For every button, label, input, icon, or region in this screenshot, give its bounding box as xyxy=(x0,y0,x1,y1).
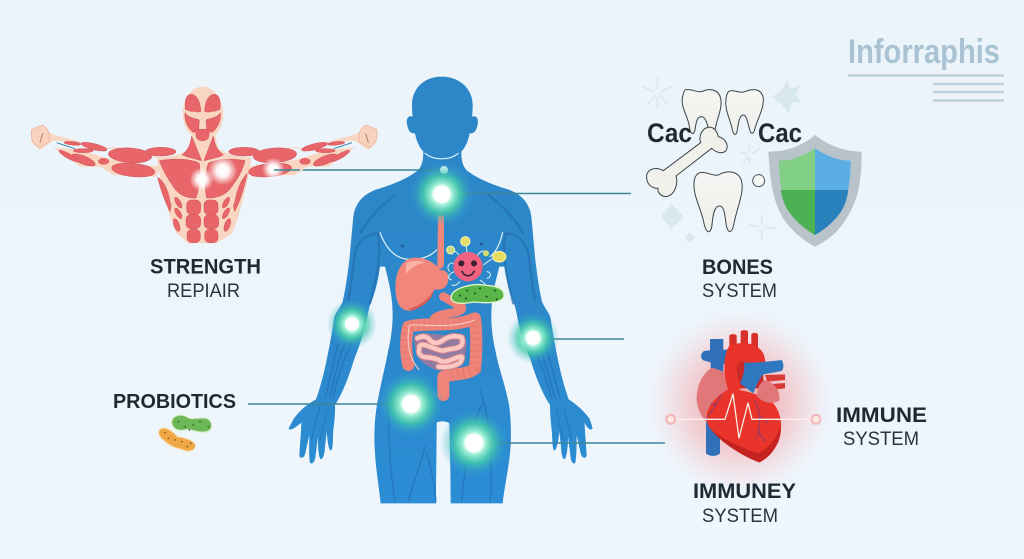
label: strength repair xyxy=(150,256,261,302)
arm connector over muscle xyxy=(274,169,300,171)
panel: muscle figure xyxy=(31,87,377,243)
head muscles xyxy=(185,94,201,112)
small intestine xyxy=(414,333,466,371)
duodenum xyxy=(433,297,462,323)
fists xyxy=(31,125,377,147)
vena cava lower xyxy=(706,412,720,456)
microbe character xyxy=(447,237,506,288)
nipples xyxy=(401,244,404,248)
icon: probiotic bacteria xyxy=(159,415,212,451)
label: immuney system: SYSTEM xyxy=(702,506,778,527)
skin base xyxy=(32,87,377,243)
right atrium xyxy=(757,380,779,403)
heart glow xyxy=(648,311,832,495)
tooth top left xyxy=(682,90,721,134)
label: immune system: IMMUNE xyxy=(836,404,927,427)
coronary veins xyxy=(707,395,768,442)
panel: heart xyxy=(648,311,832,495)
vena cava upper xyxy=(701,339,732,375)
panel: bones teeth and shield xyxy=(643,78,862,247)
label: Cac left: Cac xyxy=(647,118,692,148)
pulmonary artery xyxy=(740,360,783,393)
eyes xyxy=(188,112,217,116)
muscle highlights xyxy=(190,167,214,191)
label: probiotics: PROBIOTICS xyxy=(113,391,236,413)
right red vessels xyxy=(765,374,785,390)
glowing joint markers xyxy=(327,162,559,477)
label: Cac right: Cac xyxy=(758,118,802,148)
label: strength repair: STRENGTH xyxy=(150,256,261,278)
muscles xyxy=(58,94,351,243)
muscle shading xyxy=(312,195,572,502)
logo: Inforraphis: Inforraphis xyxy=(848,33,1000,71)
connector lines xyxy=(248,170,665,443)
body silhouette xyxy=(289,77,593,503)
shield xyxy=(768,135,862,247)
label: bones system: SYSTEM xyxy=(702,281,777,302)
label: immuney system xyxy=(693,480,796,527)
left arm xyxy=(108,147,152,164)
label: immune system: SYSTEM xyxy=(843,429,919,450)
icon: digestive organs and microbes xyxy=(395,215,506,395)
green bacterium xyxy=(451,285,504,303)
label: strength repair: REPIAIR xyxy=(167,281,240,302)
label: bones system: BONES xyxy=(702,256,773,279)
chest xyxy=(159,159,200,198)
aortic branches xyxy=(729,330,758,349)
decorative sparkles xyxy=(643,78,800,242)
neck and traps xyxy=(182,136,202,161)
collarbone and chest highlights xyxy=(380,153,503,259)
tooth bottom xyxy=(694,172,742,232)
bone xyxy=(647,127,727,197)
label: immune system xyxy=(836,404,927,450)
large intestine xyxy=(406,318,476,395)
panel: central body figure xyxy=(289,77,593,503)
lats xyxy=(158,177,171,212)
left atrium xyxy=(697,368,735,425)
esophagus xyxy=(437,215,444,269)
stomach / liver xyxy=(395,258,448,311)
pulse line xyxy=(665,394,822,438)
forearm tendons xyxy=(57,143,352,149)
label: immuney system: IMMUNEY xyxy=(693,480,796,503)
tooth top right xyxy=(726,90,763,135)
abs xyxy=(187,200,201,215)
small calcium dot xyxy=(753,175,765,187)
arch inner fill xyxy=(735,358,763,388)
label: bones system xyxy=(702,256,777,302)
right arm xyxy=(253,147,297,164)
heart main xyxy=(707,388,781,462)
aortic arch xyxy=(724,343,765,393)
